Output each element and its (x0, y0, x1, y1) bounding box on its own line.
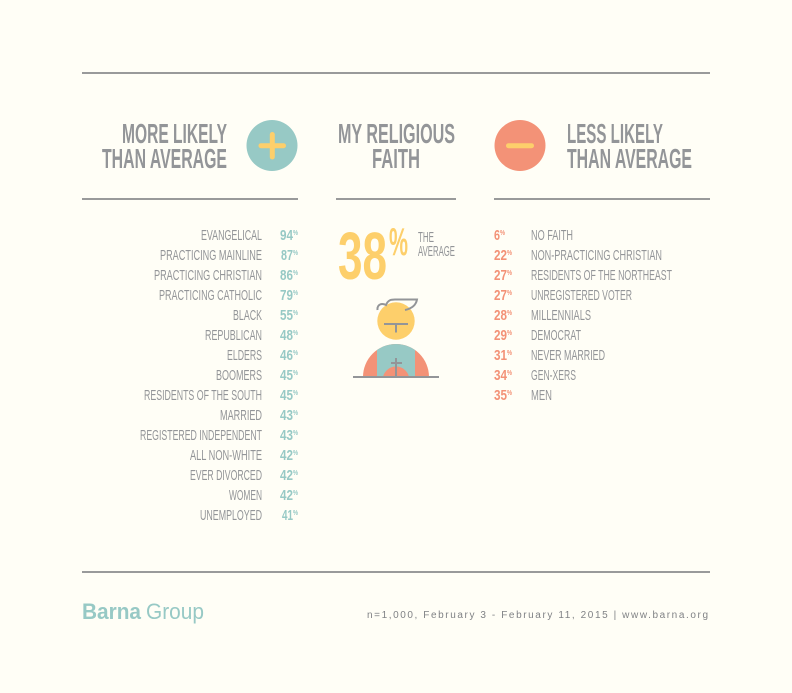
row: ever divorced: % (293, 468, 298, 477)
icon: minus (494, 120, 546, 171)
row: unemployed: % (293, 508, 298, 517)
heading: more likely than average (102, 118, 227, 174)
row: never married: NEVER MARRIED (531, 347, 605, 364)
row: black: BLACK (233, 307, 262, 324)
row: practicing mainline: 87 (281, 247, 293, 264)
row: non-practicing christian (494, 247, 662, 264)
row: women: WOMEN (229, 487, 262, 504)
heading: more likely than average: THAN AVERAGE (102, 143, 227, 174)
row: practicing catholic: PRACTICING CATHOLIC (159, 287, 262, 304)
row: no faith: 6 (494, 227, 500, 244)
heading: my religious faith (338, 118, 455, 174)
row: residents of the northeast: 27 (494, 267, 507, 284)
row: residents of the south: % (293, 388, 298, 397)
row: boomers: 45 (280, 367, 293, 384)
row: residents of the northeast: RESIDENTS OF THE NORTHEAST (531, 267, 672, 284)
row: married: % (293, 408, 298, 417)
row: democrat: 29 (494, 327, 507, 344)
row: millennials: MILLENNIALS (531, 307, 591, 324)
callout: 38 percent average (338, 219, 455, 294)
row: no faith: % (500, 228, 505, 237)
row: men: % (507, 388, 512, 397)
row: gen-xers (494, 367, 576, 384)
row: elders: ELDERS (227, 347, 262, 364)
row: never married: 31 (494, 347, 507, 364)
panel: less likely list (494, 227, 672, 404)
logo: Barna Group: Barna (82, 599, 142, 624)
row: registered independent: % (293, 428, 298, 437)
row: unemployed: 41 (282, 507, 293, 524)
row: men (494, 387, 552, 404)
row: unregistered voter: % (507, 288, 512, 297)
row: gen-xers: 34 (494, 367, 508, 384)
row: women: % (293, 488, 298, 497)
row: evangelical: % (293, 228, 298, 237)
source note: n=1,000, February 3 - February 11, 2015 | www.barna.org (367, 610, 708, 621)
heading: less likely than average: LESS LIKELY (567, 118, 663, 149)
row: black: % (293, 308, 298, 317)
row: women: 42 (280, 487, 293, 504)
row: all non-white: % (293, 448, 298, 457)
panel: more likely list (140, 227, 298, 524)
row: never married (494, 347, 605, 364)
row: residents of the northeast: % (507, 268, 512, 277)
icon: plus (246, 120, 298, 171)
callout: 38 percent average: 38 (338, 219, 387, 294)
callout: 38 percent average: THE (418, 229, 434, 246)
row: republican: 48 (280, 327, 293, 344)
row: married: 43 (280, 407, 293, 424)
row: men: MEN (531, 387, 552, 404)
row: residents of the northeast (494, 267, 672, 284)
row: all non-white: 42 (280, 447, 293, 464)
row: practicing mainline: PRACTICING MAINLINE (160, 247, 262, 264)
row: ever divorced: 42 (280, 467, 293, 484)
row: registered independent: REGISTERED INDEPENDENT (140, 427, 262, 444)
row: millennials: % (507, 308, 512, 317)
row: gen-xers: GEN-XERS (531, 367, 576, 384)
callout: 38 percent average: AVERAGE (418, 243, 455, 260)
row: no faith (494, 227, 573, 244)
heading: more likely than average: MORE LIKELY (122, 118, 227, 149)
row: practicing christian: PRACTICING CHRISTIAN (154, 267, 262, 284)
row: registered independent: 43 (280, 427, 293, 444)
row: republican: REPUBLICAN (205, 327, 262, 344)
row: millennials: 28 (494, 307, 507, 324)
row: residents of the south: 45 (280, 387, 293, 404)
row: unregistered voter: 27 (494, 287, 507, 304)
row: evangelical: 94 (280, 227, 294, 244)
row: millennials (494, 307, 591, 324)
row: unemployed: UNEMPLOYED (200, 507, 262, 524)
row: men: 35 (494, 387, 507, 404)
row: elders: % (293, 348, 298, 357)
row: unregistered voter (494, 287, 632, 304)
logo: Barna Group: Group (146, 599, 204, 624)
row: democrat (494, 327, 581, 344)
row: evangelical: EVANGELICAL (201, 227, 262, 244)
heading: my religious faith: FAITH (372, 143, 420, 174)
row: practicing christian: % (293, 268, 298, 277)
heading: my religious faith: MY RELIGIOUS (338, 118, 455, 149)
row: elders: 46 (280, 347, 293, 364)
row: residents of the south: RESIDENTS OF THE SOUTH (144, 387, 262, 404)
row: practicing christian: 86 (280, 267, 293, 284)
row: black: 55 (280, 307, 293, 324)
row: democrat: DEMOCRAT (531, 327, 581, 344)
logo: Barna Group (82, 599, 204, 624)
row: boomers: % (293, 368, 298, 377)
row: non-practicing christian: % (507, 248, 512, 257)
row: practicing catholic: % (293, 288, 298, 297)
row: gen-xers: % (507, 368, 512, 377)
row: non-practicing christian: 22 (494, 247, 507, 264)
row: married: MARRIED (220, 407, 262, 424)
heading: less likely than average: THAN AVERAGE (567, 143, 692, 174)
callout: 38 percent average: % (389, 221, 408, 264)
row: ever divorced: EVER DIVORCED (190, 467, 262, 484)
icon: praying person (353, 300, 439, 378)
row: practicing catholic: 79 (280, 287, 293, 304)
row: no faith: NO FAITH (531, 227, 573, 244)
row: boomers: BOOMERS (216, 367, 262, 384)
row: practicing mainline: % (293, 248, 298, 257)
row: republican: % (293, 328, 298, 337)
row: all non-white: ALL NON-WHITE (190, 447, 262, 464)
row: unregistered voter: UNREGISTERED VOTER (531, 287, 632, 304)
heading: less likely than average (567, 118, 692, 174)
row: democrat: % (507, 328, 512, 337)
row: non-practicing christian: NON-PRACTICING CHRISTIAN (531, 247, 662, 264)
row: never married: % (507, 348, 512, 357)
